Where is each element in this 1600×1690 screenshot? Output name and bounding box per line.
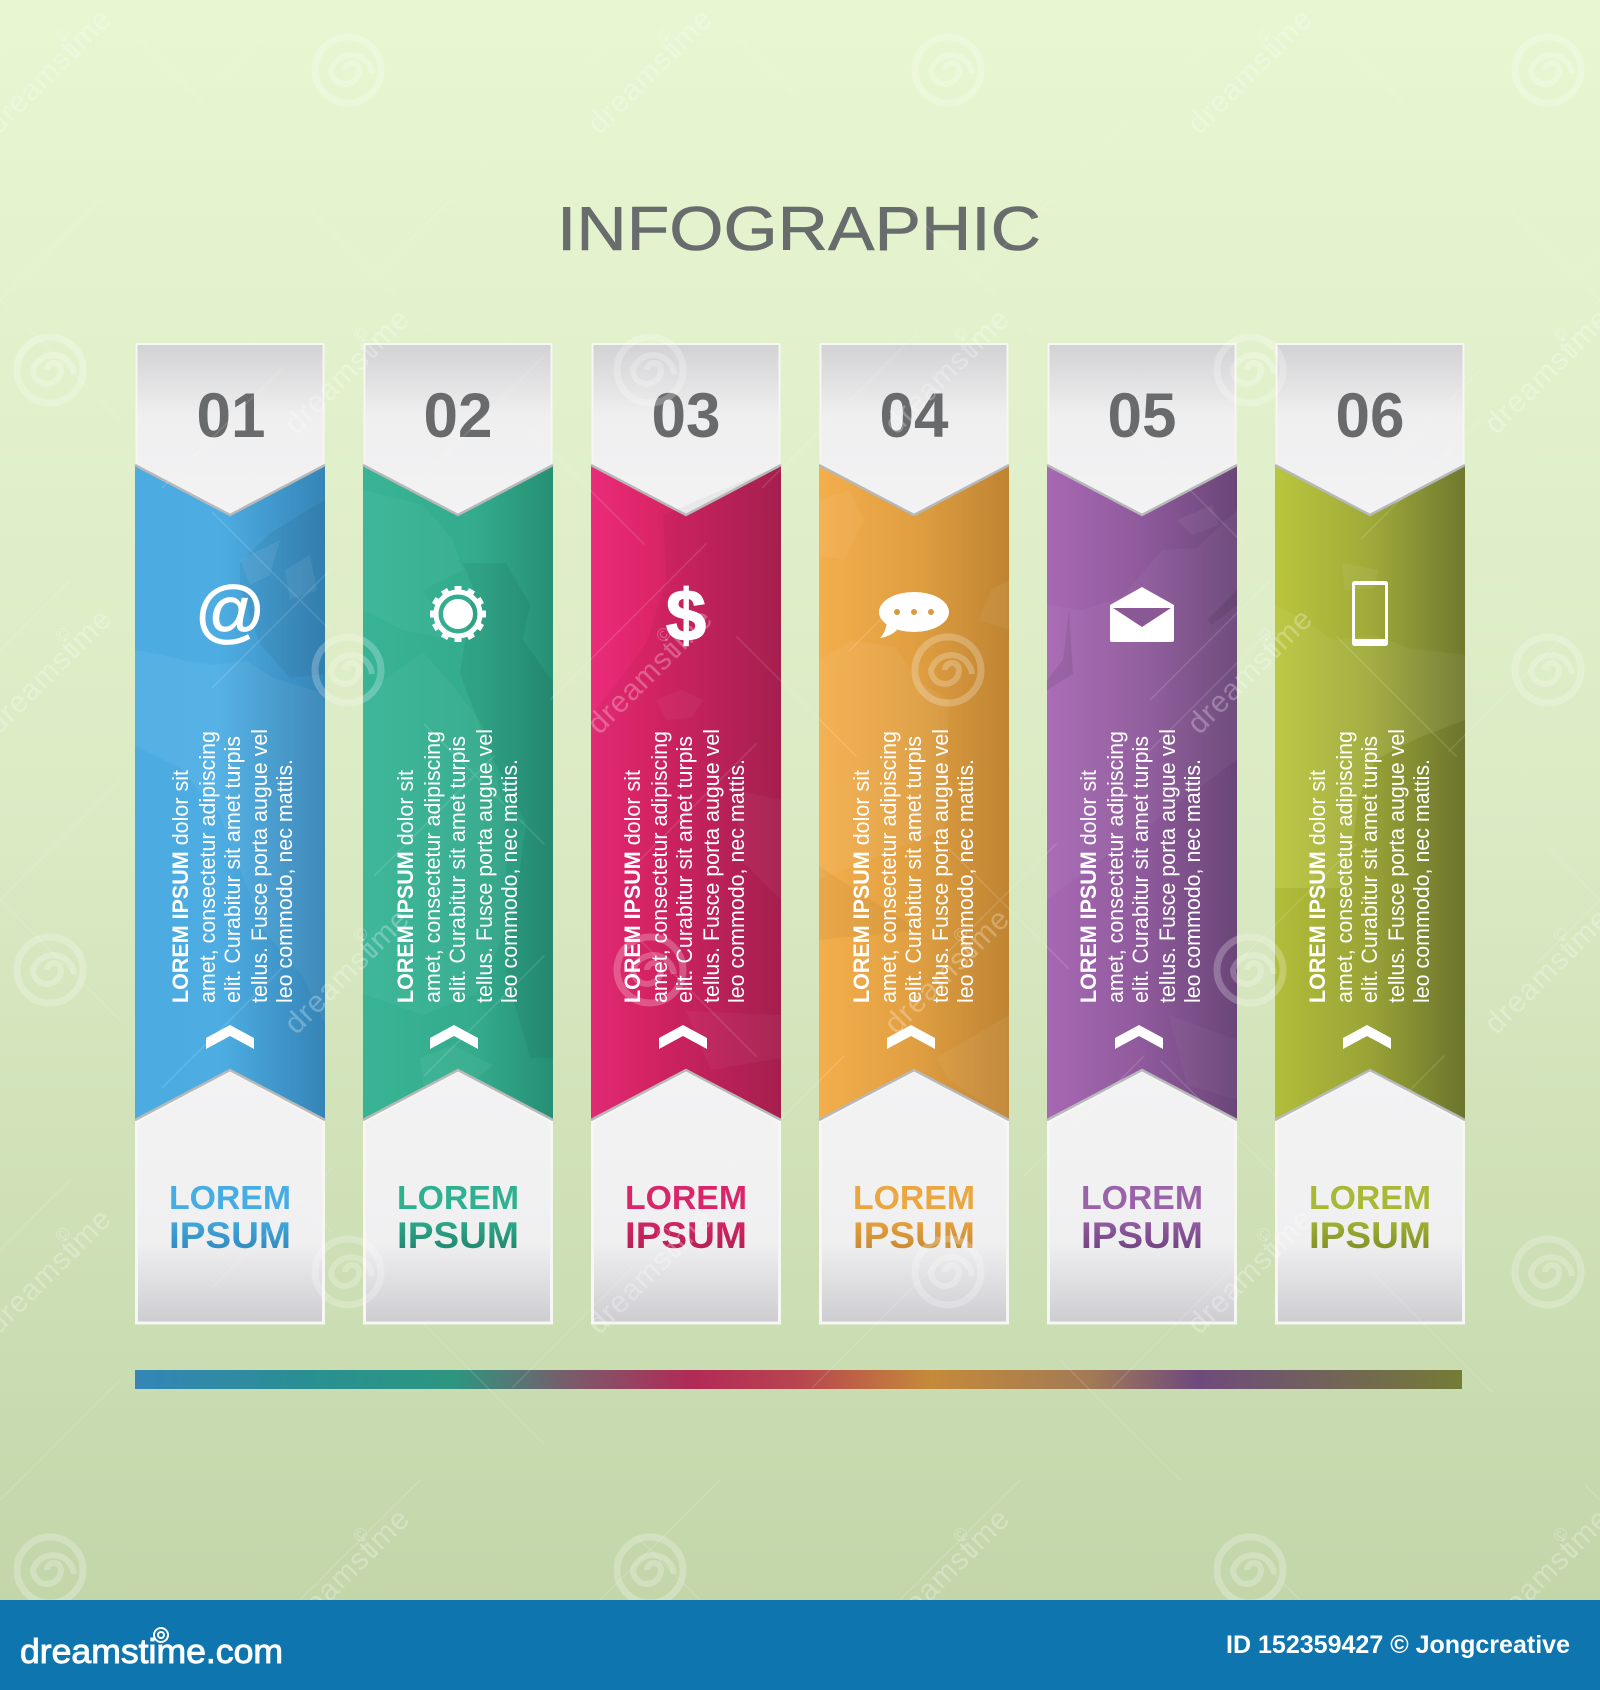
label 1 (169, 1179, 291, 1256)
watermark overlay: ime (1260, 602, 1320, 662)
up chevron 6 (1343, 1025, 1391, 1049)
watermark overlay: © (652, 1222, 676, 1246)
watermark overlay: dreamst (878, 936, 983, 1041)
body text 4: elit. Curabitur sit amet turpis (901, 736, 926, 1003)
watermark overlay: ime (1260, 2, 1320, 62)
band 3 map (591, 465, 781, 1120)
body text 4 (849, 729, 978, 1003)
body text 6: elit. Curabitur sit amet turpis (1357, 736, 1382, 1003)
column 5 (1047, 344, 1237, 1323)
watermark overlay: © (51, 22, 75, 46)
label 1: IPSUM (169, 1215, 291, 1256)
watermark overlay: © (652, 22, 676, 46)
up chevron 2 (430, 1025, 478, 1049)
body text 6: leo commodo, nec mattis. (1409, 759, 1434, 1003)
watermark overlay: © (1252, 622, 1276, 646)
watermark overlay: dreamst (581, 636, 686, 741)
band 5 (1047, 465, 1237, 1120)
watermark overlay: ime (357, 302, 417, 362)
body text 4: amet, consectetur adipiscing (876, 731, 901, 1003)
chevron edges 3 (591, 465, 781, 1120)
body text 2: leo commodo, nec mattis. (497, 759, 522, 1003)
body text 4: LOREM IPSUM dolor sit (849, 770, 874, 1003)
body text 3 (620, 729, 749, 1003)
chevron edges 6 (1275, 465, 1465, 1120)
column 2 (363, 344, 553, 1323)
body text 1 (168, 729, 297, 1003)
watermark overlay: © (652, 622, 676, 646)
band 5 map (1047, 505, 1237, 1100)
watermark overlay: ime (660, 602, 720, 662)
label 3 (625, 1179, 747, 1256)
icon: phone (1352, 581, 1388, 646)
watermark overlay: dreamst (878, 336, 983, 441)
up chevron 1 (206, 1025, 254, 1049)
body text 1: amet, consectetur adipiscing (195, 731, 220, 1003)
body text 6: amet, consectetur adipiscing (1332, 731, 1357, 1003)
label 4: LOREM (853, 1179, 975, 1216)
watermark overlay: © (51, 1222, 75, 1246)
watermark overlay: ime (957, 902, 1017, 962)
label 1: LOREM (169, 1179, 291, 1216)
watermark overlay: © (949, 1522, 973, 1546)
watermark overlay: dreamst (278, 336, 383, 441)
label 6: IPSUM (1309, 1215, 1431, 1256)
watermark overlay: © (1252, 22, 1276, 46)
body text 2: elit. Curabitur sit amet turpis (445, 736, 470, 1003)
watermark overlay: ime (357, 902, 417, 962)
label 5: IPSUM (1081, 1215, 1203, 1256)
band 2 (363, 465, 553, 1120)
label 6 (1309, 1179, 1431, 1256)
body text 3: tellus. Fusce porta augue vel (699, 729, 724, 1003)
header card 5 (1048, 344, 1236, 516)
footer card 2 (364, 1070, 552, 1323)
watermark overlay: dreamst (1478, 336, 1583, 441)
body text 6: LOREM IPSUM dolor sit (1305, 770, 1330, 1003)
header card 3 (592, 344, 780, 516)
chevron edges 4 (819, 465, 1009, 1120)
watermark overlay: ime (59, 1202, 119, 1262)
footer card 1 (136, 1070, 324, 1323)
watermark overlay: ime (957, 302, 1017, 362)
header card 1 (136, 344, 324, 516)
body text 6 (1305, 729, 1434, 1003)
body text 3: amet, consectetur adipiscing (647, 731, 672, 1003)
label 2 (397, 1179, 519, 1256)
watermark overlay: © (1549, 922, 1573, 946)
body text 3: leo commodo, nec mattis. (724, 759, 749, 1003)
watermark overlay: ime (1260, 1202, 1320, 1262)
body text 1: elit. Curabitur sit amet turpis (220, 736, 245, 1003)
band 1 map (135, 500, 325, 1024)
footer logo spiral (154, 1628, 168, 1642)
chevron edges 1 (135, 465, 325, 1120)
title: INFOGRAPHIC (557, 195, 1041, 264)
body text 5: elit. Curabitur sit amet turpis (1128, 736, 1153, 1003)
label 3: IPSUM (625, 1215, 747, 1256)
watermark overlay: dreamst (1478, 936, 1583, 1041)
body text 3: elit. Curabitur sit amet turpis (672, 736, 697, 1003)
footer logo: dreamstime.com (20, 1633, 283, 1671)
label 4: IPSUM (853, 1215, 975, 1256)
band 2 map (363, 490, 553, 1090)
gradient bar (135, 1370, 1462, 1389)
header card 2 (364, 344, 552, 516)
watermark overlay: © (949, 922, 973, 946)
number 3: 03 (652, 380, 720, 451)
header card 6 (1276, 344, 1464, 516)
watermark overlay: ime (59, 602, 119, 662)
label 3: LOREM (625, 1179, 747, 1216)
number 4: 04 (880, 380, 949, 451)
footer card 5 (1048, 1070, 1236, 1323)
band 6 (1275, 465, 1465, 1120)
number 1: 01 (197, 380, 265, 451)
band 3 (591, 465, 781, 1120)
footer card 3 (592, 1070, 780, 1323)
body text 5: leo commodo, nec mattis. (1180, 759, 1205, 1003)
label 5 (1081, 1179, 1203, 1256)
watermark overlay: ime (957, 1502, 1017, 1562)
footer bar (0, 1600, 1600, 1690)
number 5: 05 (1108, 380, 1176, 451)
watermark overlay: ime (59, 2, 119, 62)
body text 4: leo commodo, nec mattis. (953, 759, 978, 1003)
body text 5: amet, consectetur adipiscing (1103, 731, 1128, 1003)
icon: gear (420, 576, 496, 652)
watermark overlay: dreamst (1181, 1236, 1286, 1341)
label 6: LOREM (1309, 1179, 1431, 1216)
watermark overlay: © (1549, 322, 1573, 346)
body text 1: LOREM IPSUM dolor sit (168, 770, 193, 1003)
chevron edges 2 (363, 465, 553, 1120)
column 3 (591, 344, 781, 1323)
number 6: 06 (1336, 380, 1404, 451)
watermark overlay: dreamst (581, 1236, 686, 1341)
body text 6: tellus. Fusce porta augue vel (1384, 729, 1409, 1003)
body text 5: LOREM IPSUM dolor sit (1076, 770, 1101, 1003)
watermark overlay: dreamst (1181, 636, 1286, 741)
body text 2: LOREM IPSUM dolor sit (393, 770, 418, 1003)
band 4 (819, 465, 1009, 1120)
watermark overlay: dreamst (581, 36, 686, 141)
watermark overlay: ime (357, 1502, 417, 1562)
watermark overlay: © (349, 922, 373, 946)
header card 4 (820, 344, 1008, 516)
body text 2: amet, consectetur adipiscing (420, 731, 445, 1003)
label 4 (853, 1179, 975, 1256)
icon: at sign: @ (193, 572, 265, 650)
up chevron 3 (659, 1025, 707, 1049)
column 4 (819, 344, 1009, 1323)
band 4 map (819, 490, 1009, 1120)
body text 3: LOREM IPSUM dolor sit (620, 770, 645, 1003)
watermark overlay: © (1549, 1522, 1573, 1546)
label 5: LOREM (1081, 1179, 1203, 1216)
chevron edges 5 (1047, 465, 1237, 1120)
watermark overlay: © (1252, 1222, 1276, 1246)
footer card 4 (820, 1070, 1008, 1323)
watermark overlay: © (51, 622, 75, 646)
footer card 6 (1276, 1070, 1464, 1323)
body text 2 (393, 729, 522, 1003)
footer credit: ID 152359427 © Jongcreative (1226, 1631, 1570, 1659)
watermark overlay: ime (660, 1202, 720, 1262)
watermark overlay: © (349, 322, 373, 346)
label 2: IPSUM (397, 1215, 519, 1256)
watermark overlay: ime (660, 2, 720, 62)
watermark overlay: dreamst (278, 1536, 383, 1641)
up chevron 4 (887, 1025, 935, 1049)
up chevron 5 (1115, 1025, 1163, 1049)
column 6 (1275, 344, 1465, 1323)
watermark overlay: dreamst (878, 1536, 983, 1641)
body text 1: tellus. Fusce porta augue vel (247, 729, 272, 1003)
watermark overlay: © (349, 1522, 373, 1546)
body text 5: tellus. Fusce porta augue vel (1155, 729, 1180, 1003)
watermark overlay: dreamst (1478, 1536, 1583, 1641)
number 2: 02 (424, 380, 492, 451)
watermark overlay: © (949, 322, 973, 346)
band 6 map (1275, 563, 1465, 1120)
body text 4: tellus. Fusce porta augue vel (928, 729, 953, 1003)
body text 2: tellus. Fusce porta augue vel (472, 729, 497, 1003)
body text 1: leo commodo, nec mattis. (272, 759, 297, 1003)
watermark overlay: dreamst (278, 936, 383, 1041)
icon: envelope (1110, 587, 1174, 642)
icon: dollar: $ (666, 576, 706, 656)
column 1 (135, 344, 325, 1323)
watermark overlay: dreamst (1181, 36, 1286, 141)
label 2: LOREM (397, 1179, 519, 1216)
body text 5 (1076, 729, 1205, 1003)
icon: speech bubble (879, 592, 949, 638)
band 1 (135, 465, 325, 1120)
